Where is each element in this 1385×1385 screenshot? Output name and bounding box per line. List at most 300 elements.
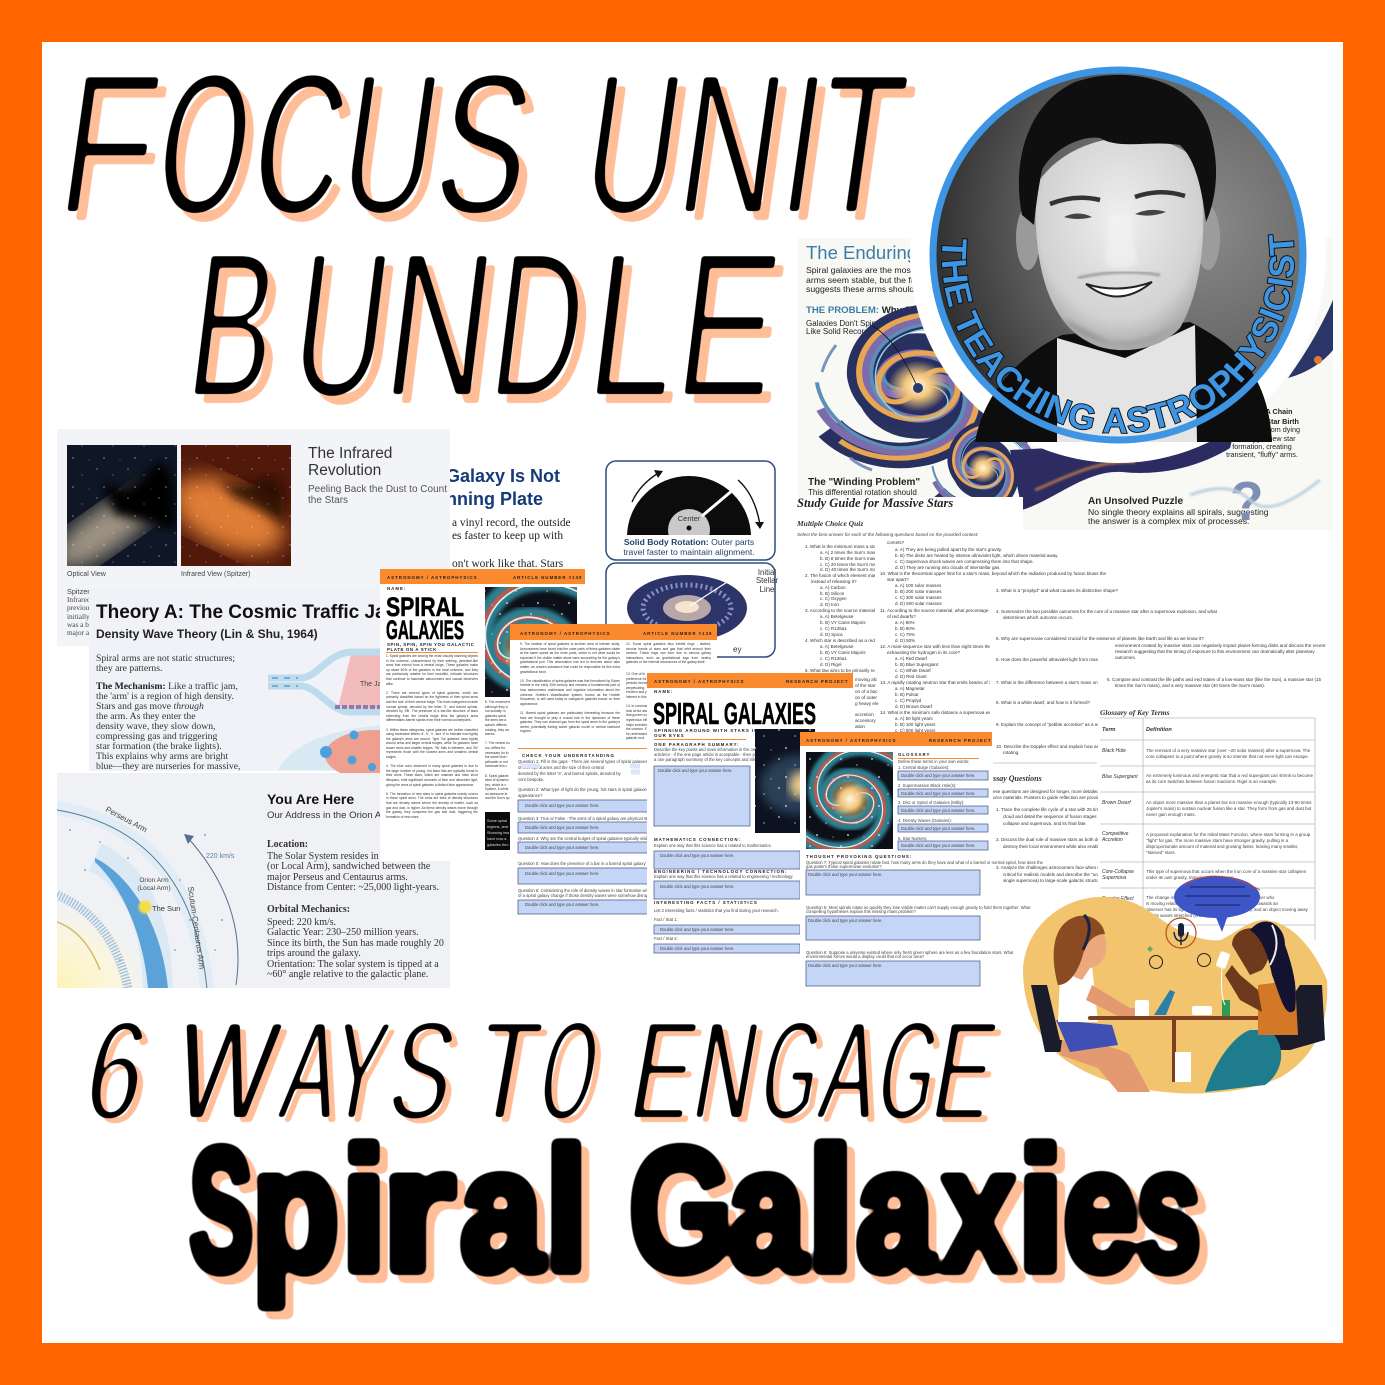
subtitle: 6 WAYS TO ENGAGE: Y (320, 993, 399, 1150)
black callout text: galaxies thro (487, 843, 509, 847)
quiz column 2 lower: a. A) Magnetar (895, 686, 925, 691)
glossary table: The change in frequency of a wave in relation to an observer who (1146, 895, 1275, 900)
black callout text (487, 819, 510, 847)
second column text: sites of dynamic (485, 778, 509, 782)
quiz column 1: explosion? (811, 674, 833, 679)
peeking quiz column between worksheets: moving afc (855, 677, 878, 682)
unsolved puzzle text: the answer is a complex mix of processes. (1088, 516, 1249, 526)
badge: portrait of The Teaching Astrophysicist (930, 66, 1306, 444)
orbital mechanics text: Orientation: The solar system is tipped at a (267, 959, 439, 970)
name field: NAME: (654, 689, 673, 694)
essay continuation text (1107, 643, 1326, 688)
second column text: waves. (485, 732, 495, 736)
slide text: es faster to keep up with (452, 530, 563, 542)
map: galactic arms: (Local Arm) (137, 885, 171, 892)
mechanism text: density wave, they slow down, (96, 721, 215, 732)
short answer column: 3. Analyze the challenges astronomers face when modeling (996, 865, 1116, 870)
title: BUNDLE: N (383, 218, 514, 449)
glossary heading: Glossary of Key Terms (1100, 708, 1170, 717)
glossary fields: 1. Central Bulge (Galaxies): (898, 765, 949, 770)
quiz column 1: c. C) R136a1 (820, 656, 847, 661)
worksheet subtitle: SPINNING AROUND WITH STARS IN (654, 728, 758, 733)
galaxy image (755, 729, 815, 833)
quiz column 2 lower: 13. A rapidly rotating neutron star that emits beams of X-rays (880, 680, 1003, 685)
orange rule (518, 748, 648, 749)
title: BUNDLE: B (178, 211, 289, 440)
orange rule (386, 652, 478, 653)
glossary table: "fight" for gas. The more massive stars have stronger gravity, pulling in a (1146, 838, 1289, 843)
location text: major Perseus and Centaurus arms. (267, 872, 408, 883)
diagram: star formation region (278, 725, 425, 780)
question text: core bespoke. (518, 777, 544, 782)
quiz column 2 lower: b. B) 80% (895, 626, 915, 631)
title: FOCUS UNIT (46, 31, 926, 265)
answer prompts: Double click and type your answer here. (525, 845, 599, 850)
question text: Question 5: How does the presence of a bar in a barred spiral galaxy affect it (518, 861, 661, 866)
quiz column 2 (880, 540, 1107, 606)
second column text: rotating, they wo (485, 728, 509, 732)
worksheet subtitle: SPIN, SPIN, SPIN YOU GALACTIC (387, 642, 475, 647)
orbital mechanics text: Orbital Mechanics: (267, 904, 350, 915)
location text: Distance from Center: ~25,000 light-years. (267, 882, 439, 893)
article paragraphs column 1 (520, 642, 620, 747)
black callout text: regions, and (487, 825, 508, 829)
article paragraphs: 4. The blue color observed in many spiral galaxies is due to the large number of young, hot stars that are typically found in their arms. These stars, which are massive and have short lifespans, emit significant amounts of blue and ultraviolet light, giving the arms of spiral galaxies a distinct blue appearance. (386, 764, 478, 787)
quiz instructions: Select the best answer for each of the following questions based on the provided context: (797, 532, 979, 537)
worksheet header bar: ASTRONOMY / ASTROPHYSICS (654, 679, 745, 684)
cut-off notes: Spitzer (67, 587, 90, 596)
quiz column 1: 3. According to the source material, which star (805, 608, 898, 613)
slide heading (446, 466, 560, 509)
glossary fields (898, 765, 964, 841)
slide intro text (806, 265, 956, 294)
theory 2 text: stars trigger new star (1228, 434, 1296, 443)
main title: Spiral Galaxies: l (553, 1120, 596, 1315)
second column text: key, which is c (485, 783, 506, 787)
title: FOCUS UNIT: O (154, 41, 273, 265)
problem note: Galaxies Don't Spin (806, 319, 876, 328)
quiz column 1: c. C) 20 times the Sun's mass ok (820, 562, 887, 567)
quiz column 1: instead of releasing it? (811, 579, 857, 584)
answer prompts: Double click and type your answer here. (525, 803, 599, 808)
box: differential rotation: Initial (758, 568, 776, 577)
quiz column 2: star apart? (887, 577, 909, 582)
worksheet header bar: RESEARCH PROJECT (786, 679, 849, 684)
second column text: the same blue l (485, 755, 507, 759)
quiz column 2: a. A) 100 solar masses (895, 583, 942, 588)
slide text (452, 517, 571, 570)
panel: The Infrared Revolution slide (43, 429, 450, 646)
glossary table: never gain enough mass. (1146, 812, 1196, 817)
worksheet subtitle (654, 728, 758, 738)
glossary fields: 4. Density Waves (Galaxies): (898, 818, 952, 823)
worksheet header bar: RESEARCH PROJECT (929, 738, 992, 743)
thought provoking questions: gas pattern those supernovae evolution? (806, 864, 882, 869)
question text: Question 4: Why are the central bulges of spiral galaxies typically visible in (518, 836, 657, 841)
slide heading (308, 445, 392, 479)
glossary fields: 2. Supermassive Black Hole(s): (898, 783, 956, 788)
map: galactic arms: The Sun (152, 904, 180, 913)
question text: denoted by the letter 'S', and barred spirals, denoted by (518, 771, 622, 776)
thought provoking heading: THOUGHT PROVOKING QUESTIONS: (806, 854, 912, 859)
title: BUNDLE: L (576, 211, 693, 440)
wisps by question mark (1190, 480, 1320, 507)
worksheet subtitle: OUR EYES (654, 733, 685, 738)
blue ring (933, 70, 1303, 440)
short answer column: 5. Why are supernovae considered crucial for the existence of planets like Earth and life as we know it? (996, 636, 1204, 641)
question text: Question 6: Considering the role of density waves in star formation within the (518, 888, 661, 893)
short answer column: 6. How does the powerful ultraviolet light from massive stars affect nearby (996, 657, 1145, 662)
illustration: right star sliver (1288, 300, 1333, 378)
subtitle: 6 WAYS TO ENGAGE: A (277, 997, 359, 1154)
short answer column: 4. Summarize the two possible outcomes for the core of a massive star after a supernova explosion, and what (996, 609, 1218, 614)
quiz column 1: a. A) Betelgeuse (820, 614, 854, 619)
study guide heading: Study Guide for Massive Stars (797, 496, 953, 510)
panel: worksheet article page 1 (380, 569, 618, 861)
peeking quiz column between worksheets: accretion (855, 712, 874, 717)
second column text: too, differs fro (485, 746, 505, 750)
slide subtitle: Density Wave Theory (Lin & Shu, 1964) (96, 627, 318, 641)
title: BUNDLE: B (186, 220, 298, 449)
short answer column: 8. What is a white dwarf, and how is it formed? (996, 700, 1090, 705)
quiz column 1: b. B) VY Canis Majoris (820, 650, 866, 655)
mechanism text: the arm. As they enter the (96, 711, 196, 722)
summary heading: ONE PARAGRAPH SUMMARY: (654, 742, 740, 747)
map: galactic arms: Scutum-Centaurus Arm (186, 886, 207, 970)
slide subtitle: Peeling Back the Dust to Count (308, 484, 447, 495)
quiz column 1: d. D) 40 times the Sun's mass ok (820, 567, 887, 572)
panel: research project worksheet page 1 (647, 673, 853, 990)
question text: Question 1: Fill in the gaps - There are several types of spiral galaxies, which (518, 759, 661, 764)
thought provoking questions: Question 6: Suppose a universe existed where only fresh green sphere are less as a few foundation stars. What (806, 950, 1014, 955)
main title: Spiral Galaxies: p (260, 1119, 347, 1315)
article paragraphs: 5. The formation of new stars in spiral galaxies mainly occurs in these spiral arms. The arms are sites of density structures that are density waves where the density of matter, such as gas and dust, is higher. As these density waves move through the galaxy, they compress the gas and dust, triggering the formation of new stars. (386, 792, 478, 819)
quiz column 1: b. B) Silicon (820, 591, 845, 596)
quiz column 2 lower: c. C) Proplyd (895, 698, 922, 703)
worksheet title: SPIRAL GALAXIES (653, 696, 816, 731)
cut-off notes (67, 587, 92, 637)
second column text: 8. Spiral galaxie (485, 774, 508, 778)
short answer column (992, 588, 1218, 883)
main title: Spiral Galaxies: l (807, 1112, 854, 1308)
title: FOCUS UNIT: F (54, 42, 182, 265)
quiz column 1: c. C) Oxygen (820, 596, 847, 601)
second column text: an awesome te (485, 792, 507, 796)
image: optical view of Milky Way (67, 445, 177, 566)
black callout text: have now a (487, 837, 507, 841)
unsolved puzzle text: An Unsolved Puzzle (1088, 496, 1183, 507)
location text (267, 839, 440, 893)
title: FOCUS UNIT: N (675, 40, 806, 265)
main title: Spiral Galaxies: a (468, 1121, 552, 1316)
subtitle: 6 WAYS TO ENGAGE: W (170, 998, 296, 1154)
theory 2 text: formation, creating (1232, 442, 1292, 451)
worksheet header bar: ARTICLE NUMBER #139 (513, 575, 583, 580)
main title: Spiral Galaxies: i (1017, 1112, 1064, 1308)
image: infrared view of Milky Way (181, 445, 291, 566)
winding problem text (808, 477, 920, 497)
subtitle: 6 WAYS TO ENGAGE: G (757, 997, 839, 1154)
image captions: Optical View (67, 571, 107, 578)
short answer column: 10. Describe the Doppler effect and explain how astronomers use it to tell (996, 744, 1144, 749)
subtitle: 6 WAYS TO ENGAGE: N (690, 997, 776, 1154)
quiz column 2: 10. What is the theoretical upper limit for a star's mass, beyond which the radiation produced by fusion blows the (880, 571, 1107, 576)
slide heading: The Infrared (308, 445, 392, 462)
article paragraphs (386, 654, 478, 844)
interesting facts section: Fact / Stat 1: (654, 917, 678, 922)
cream backing behind theory 2 (1225, 405, 1305, 470)
short answer column: 9. Explain the concept of "pebble accretion" as a new model of star formation (996, 722, 1151, 727)
peeking quiz column between worksheets: on of outer (855, 695, 877, 700)
article paragraphs column 2 lower (626, 672, 648, 747)
main title: Spiral Galaxies: G (629, 1111, 732, 1307)
title: FOCUS UNIT: C (241, 34, 359, 256)
thought provoking prompts (808, 872, 882, 968)
summary instructions (654, 747, 771, 762)
black callout text: Some spiral (487, 819, 507, 823)
glossary table: Doppler Effect (1102, 896, 1134, 902)
image captions (67, 571, 251, 578)
summary instructions: a one paragraph summary of the key concepts and information (654, 757, 771, 762)
quiz column 1: a. A) Betelgeuse (820, 644, 854, 649)
peeking quiz column between worksheets: ation (855, 724, 865, 729)
question text: of their spiral arms and the size of their central (518, 765, 604, 770)
quiz column 2 lower: c. C) White Dwarf (895, 668, 931, 673)
worksheet title (386, 592, 464, 645)
slide intro: they are patterns. (96, 663, 162, 674)
quiz column 1: d. D) Spica (820, 632, 843, 637)
short answer column: critical for realistic models and describe the "unresolved (1003, 872, 1116, 877)
glossary table: observer has its light waves compressed (blueshifted), and an object moving away (1146, 907, 1309, 912)
quiz column 2 lower: exhausting the hydrogen in its core? (887, 650, 961, 655)
problem note: Like Solid Records (806, 327, 873, 336)
main title: Spiral Galaxies: S (189, 1111, 253, 1307)
glossary table: under its own gravity, triggering an explosion. (1146, 875, 1235, 880)
title: FOCUS UNIT: O (146, 32, 265, 256)
question text: of a spiral galaxy change if those density waves were somehow disrupted? (518, 893, 657, 898)
winding problem text: This differential rotation should (808, 488, 917, 497)
box: differential rotation: ey (733, 645, 741, 654)
title: FOCUS UNIT: S (425, 34, 544, 256)
cut-off notes: previous (67, 603, 92, 612)
glossary table: Term (1102, 727, 1115, 733)
article paragraphs column 2 lower: 13. One of th (626, 672, 645, 676)
glossary prompts: Double click and type your answer here. (901, 843, 975, 848)
slide intro text: suggests these arms should quickly (806, 284, 944, 294)
slide text: on't work like that. Stars (452, 558, 564, 570)
thought provoking prompts: Double click and type your answer here. (808, 872, 882, 877)
question text: Question 3: True or False - The arms of a spiral galaxy are physical structures (518, 816, 662, 821)
quiz column 2 lower: b. B) Pulsar (895, 692, 919, 697)
main title: Spiral Galaxies: a (728, 1112, 808, 1308)
title: FOCUS UNIT: I (767, 32, 840, 256)
quiz column 1: a. A) Carbon (820, 585, 846, 590)
speech bubble (1174, 876, 1260, 932)
title: BUNDLE (178, 209, 801, 450)
second column text: System, it orbits (485, 787, 508, 791)
slide intro text: Spiral galaxies are the most common (806, 265, 949, 275)
thought provoking questions: Question 5: Most spirals rotate so quickly they lose visible matter can't supply enough gravity to hold them together. What (806, 905, 1031, 910)
second column text: necessary for fu (485, 751, 508, 755)
glossary table: An extremely luminous and energetic star that a red supergiant can shrink to become (1146, 773, 1314, 778)
mechanism text: the 'arm' is a region of high density. (96, 691, 234, 702)
thought provoking prompts: Double click and type your answer here. (808, 918, 882, 923)
subtitle: 6 WAYS TO ENGAGE: W (164, 993, 290, 1149)
map: galactic arms (57, 801, 238, 988)
worksheet header bar (510, 624, 717, 640)
orbital mechanics text: ~60° angle relative to the galactic plane. (267, 969, 428, 980)
quiz column 1: b. B) 8 times the Sun's mass ok (820, 556, 885, 561)
interesting facts section: Double click and type your answer here. (660, 927, 734, 932)
summary instructions: article/or - if the one page article is acceptable - then provide (654, 752, 767, 757)
subtitle: 6 WAYS TO ENGAGE: A (810, 992, 892, 1149)
slide heading: Theory A: The Cosmic Traffic Jam (96, 602, 403, 623)
quiz column 2 lower: a. A) 50 light years (895, 716, 933, 721)
glossary table: The remnant of a very massive star (over ~20 solar masses) after a supernova. The (1146, 748, 1311, 753)
quiz column 1: c. C) R136a1 (820, 626, 847, 631)
short answer column: single supernova) to large-scale galactic structures (1003, 878, 1106, 883)
glossary table: as its core switches between fusion reactions. Rigel is an example. (1146, 779, 1277, 784)
unsolved puzzle text: No single theory explains all spirals, suggesting (1088, 507, 1269, 517)
main title: Spiral Galaxies: i (349, 1119, 395, 1315)
unsolved puzzle text (1088, 496, 1269, 526)
cut-off notes: Infrared (67, 595, 91, 604)
subtitle: 6 WAYS TO ENGAGE: G (874, 997, 956, 1154)
box: differential rotation (606, 563, 778, 657)
quiz column 1: d. D) Rigel (820, 662, 841, 667)
table (1088, 990, 1266, 1082)
engineering section: Double click and type your answer here. (660, 884, 734, 889)
black callout text: Stunning ima (487, 831, 510, 835)
location text: Location: (267, 839, 308, 850)
title: BUNDLE: N (375, 209, 505, 440)
orbital mechanics text: Since its birth, the Sun has made roughly 20 (267, 938, 444, 949)
title: FOCUS UNIT: U (581, 41, 704, 265)
theory 2 text: Shockwaves from dying (1224, 425, 1300, 434)
thought provoking answer boxes (806, 870, 980, 986)
quiz column 2: b. B) 200 solar masses (895, 589, 942, 594)
worksheet header bar: ASTRONOMY / ASTROPHYSICS (387, 575, 478, 580)
worksheet header bar (380, 569, 585, 584)
title: BUNDLE: U (282, 211, 402, 440)
essay continuation text: 5. Compare and contrast the life paths and end states of a low-mass star (like the Sun), a massive star (15 (1107, 677, 1322, 682)
icon: question mark: ? (1230, 470, 1264, 532)
thought provoking questions: environmental forces would a display could that not occur area? (806, 954, 925, 959)
quiz column 1: a. A) 2 times the Sun's mass ok (820, 550, 884, 555)
title: FOCUS UNIT: U (338, 41, 461, 265)
essay continuation text: research suggesting that the timing of exposure to this environment can dramatically alter planetary (1115, 649, 1315, 654)
article paragraphs: 1. Spiral galaxies are among the most visually stunning objects in the universe, characterized by their swirling, pinwheel-like arms that extend from a central bulge. These galaxies make up about 60% of the galaxies in the local universe, and they are particularly notable for their beautiful, intricate structures that continue to fascinate astronomers and casual observers alike. (386, 654, 478, 686)
mechanism text: compressing gas and triggering (96, 731, 217, 742)
short answer column: 7. What is the difference between a star's mass on the main sequence (996, 680, 1138, 685)
orbital mechanics text: Galactic Year: 230–250 million years. (267, 927, 419, 938)
curved name path (942, 238, 1294, 433)
glossary table: Core-Collapse (1102, 869, 1134, 875)
subtitle: 6 WAYS TO ENGAGE: E (929, 997, 1013, 1154)
title: FOCUS UNIT: T (811, 41, 926, 265)
second column text (485, 700, 510, 805)
essay continuation text: environment created by massive stars can negatively impact planet-forming disks and discuss the recent (1115, 643, 1326, 648)
illustration: podcast conversation (1023, 876, 1327, 1094)
second column text: 7. The central bu (485, 741, 510, 745)
quiz column 2 lower: c. C) 500 light years (895, 728, 936, 733)
quiz column 2: c. C) 300 solar masses (895, 595, 942, 600)
glossary table: Definition (1146, 727, 1172, 733)
second column text: spiral's differen (485, 723, 507, 727)
slide heading: Galaxy Is Not (446, 466, 560, 486)
article paragraphs column 2 lower: periodic forces (626, 681, 647, 685)
short answer column: collapse and supernova, and its final fate. (1003, 821, 1087, 826)
slide text: a vinyl record, the outside (452, 517, 571, 529)
article paragraphs: 2. There are several types of spiral galaxies, which are primarily classified based on the tightness of their spiral arms and the size of their central bulge. The main categories include normal spirals, denoted by the letter 'S', and barred spirals, denoted by 'SB'. The presence of a bar-like structure of stars extending from the central bulge links the galaxy's arms differentiates barred spirals from their normal counterparts. (386, 691, 478, 722)
slide heading: The Enduring Spiral (806, 242, 970, 263)
quiz column 1: d. D) Iron (820, 602, 839, 607)
glossary table: An object more massive than a planet but not massive enough (typically 13-80 times (1146, 800, 1312, 805)
subtitle: 6 WAYS TO ENGAGE: T (471, 997, 556, 1154)
glossary fields: 5. Star Nursery: (898, 836, 927, 841)
quiz column 1: 2. The fusion of which element marks the point (805, 573, 900, 578)
slide subtitle: the Stars (308, 495, 348, 506)
orbital mechanics text (267, 904, 444, 980)
answer prompts (525, 803, 599, 907)
orange rule (654, 739, 746, 740)
subtitle: 6 WAYS TO ENGAGE: A (816, 997, 898, 1154)
quiz column 2: c. C) Supernova shock waves are compressing them into that shape. (895, 559, 1034, 564)
summary prompt: Double click and type your answer here. (658, 768, 732, 773)
answer prompts: Double click and type your answer here. (525, 871, 599, 876)
quiz column 2 lower: 14. What is the minimum safe distance a supernova would be (880, 710, 1004, 715)
title: FOCUS UNIT: F (46, 33, 173, 256)
second column text: although they a (485, 705, 508, 709)
title: FOCUS UNIT: U (329, 32, 452, 256)
glossary table: Accretion (1101, 837, 1123, 843)
article paragraphs column 2: 12. Some spiral galaxies also exhibit rings - distinct, circular bands of stars and gas that orbit around their centers. These rings can form due to various galaxy interactions, such as gravitational tugs from nearby galaxies or the internal resonances of the galaxy itself. (626, 642, 711, 664)
glossary table: "starved" stars. (1146, 850, 1176, 855)
article paragraphs column 2 lower: that govern our (626, 713, 648, 717)
right chair (1262, 985, 1325, 1050)
thought provoking prompts: Double click and type your answer here. (808, 963, 882, 968)
panel: research project worksheet page 2 (786, 732, 1044, 990)
second column text: galaxies spiral. (485, 714, 507, 718)
theory 2 text: Reaction of Star Birth (1225, 417, 1299, 426)
main title: Spiral Galaxies: r (390, 1121, 463, 1316)
mathematics section (654, 837, 800, 869)
mechanism text (96, 681, 240, 772)
white ring backing (928, 65, 1308, 445)
peeking quiz column between worksheets: on of a bac (855, 689, 878, 694)
location text: The Solar System resides in the Orion Arm (267, 851, 440, 862)
map: galactic arms: Perseus Arm (104, 805, 149, 834)
quiz column 2 lower: 11. According to the source material, what percentage of stars end (880, 608, 1014, 613)
quiz column 2 lower: d. D) Brown Dwarf (895, 704, 933, 709)
peeking quiz column between worksheets (855, 677, 879, 729)
white cover for glossary column (1098, 642, 1323, 920)
box: solid body rotation: travel faster to maintain alignment. (623, 547, 755, 557)
second column text: yellowish or red (485, 760, 508, 764)
title: FOCUS UNIT: I (775, 41, 849, 265)
quiz column 2 lower: of red dwarfs? (887, 614, 916, 619)
question text (518, 759, 662, 898)
subtitle: 6 WAYS TO ENGAGE (76, 992, 1013, 1155)
slide heading: nning Plate (446, 489, 543, 509)
second column text: not actually ro (485, 709, 506, 713)
glossary prompts (901, 773, 975, 848)
sliver orange glow (1314, 356, 1322, 364)
glossary table: core collapses to a point where gravity is so intense that not even light can escape. (1146, 754, 1309, 759)
question text: appearance? (518, 793, 543, 798)
portrait photo (931, 68, 1305, 442)
theory 2 text: Theory 2: A Chain (1232, 407, 1292, 416)
